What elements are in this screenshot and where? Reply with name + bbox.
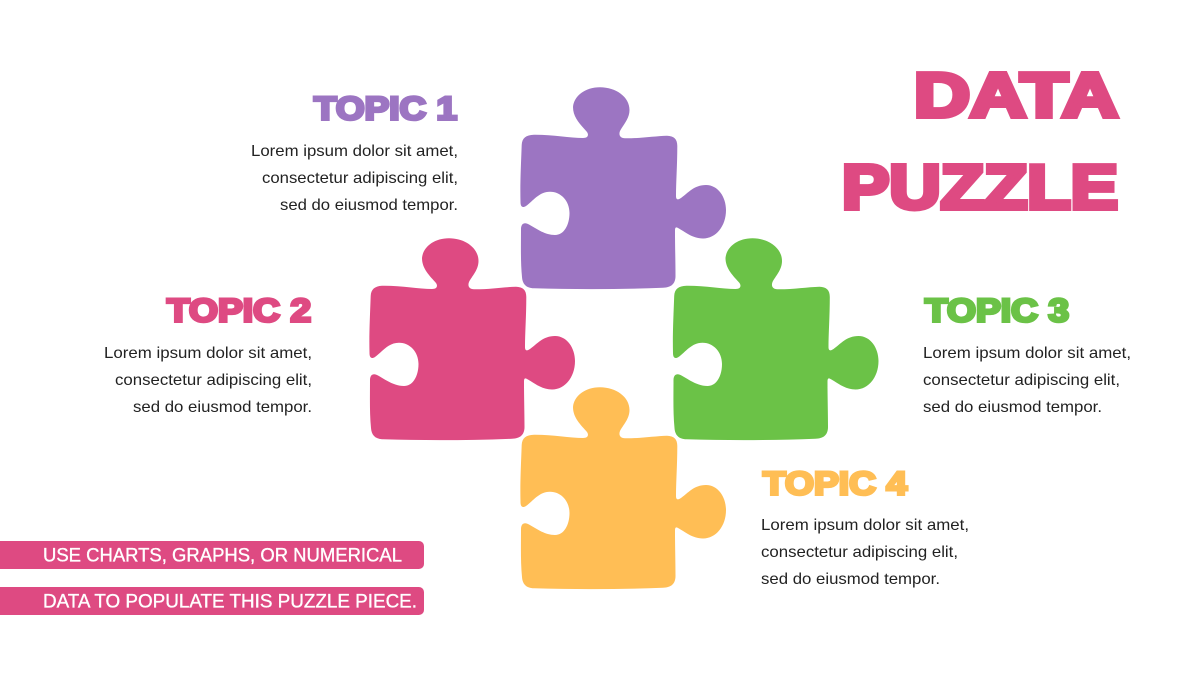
topic 1 heading: TOPIC 1 — [314, 90, 457, 126]
yellow puzzle piece — [520, 387, 726, 589]
topic 4 text: Lorem ipsum dolor sit amet, — [761, 517, 969, 534]
title: PUZZLE — [842, 154, 1118, 222]
topic 1 text: consectetur adipiscing elit, — [262, 170, 458, 187]
topic 1 text: sed do eiusmod tempor. — [280, 197, 458, 214]
title — [842, 62, 1118, 222]
topic 4 block — [761, 466, 969, 588]
callout line 2 — [0, 587, 424, 615]
pink puzzle piece — [369, 238, 575, 440]
topic 3 text: sed do eiusmod tempor. — [923, 399, 1102, 416]
topic 4 heading: TOPIC 4 — [763, 466, 907, 502]
topic 3 text: consectetur adipiscing elit, — [923, 372, 1120, 389]
title: DATA — [914, 62, 1118, 130]
topic 4 text — [761, 517, 969, 588]
topic 1 block — [251, 90, 458, 214]
topic 2 heading: TOPIC 2 — [167, 292, 311, 328]
purple puzzle piece — [520, 87, 726, 289]
topic 4 text: consectetur adipiscing elit, — [761, 544, 958, 561]
topic 2 block — [104, 292, 312, 416]
topic 2 text: sed do eiusmod tempor. — [133, 399, 312, 416]
topic 2 text: Lorem ipsum dolor sit amet, — [104, 345, 312, 362]
callout line 1 — [0, 541, 424, 569]
topic 2 text: consectetur adipiscing elit, — [115, 372, 312, 389]
callout line 1: USE CHARTS, GRAPHS, OR NUMERICAL — [43, 546, 402, 566]
topic 3 block — [923, 292, 1131, 416]
topic 2 text — [104, 345, 312, 416]
topic 1 text — [251, 143, 458, 214]
green puzzle piece — [673, 238, 878, 440]
topic 3 text — [923, 345, 1131, 416]
callout line 2: DATA TO POPULATE THIS PUZZLE PIECE. — [43, 592, 417, 612]
topic 1 text: Lorem ipsum dolor sit amet, — [251, 143, 458, 160]
topic 4 text: sed do eiusmod tempor. — [761, 571, 940, 588]
callout: chart instructions — [0, 541, 424, 615]
topic 3 text: Lorem ipsum dolor sit amet, — [923, 345, 1131, 362]
topic 3 heading: TOPIC 3 — [925, 292, 1069, 328]
